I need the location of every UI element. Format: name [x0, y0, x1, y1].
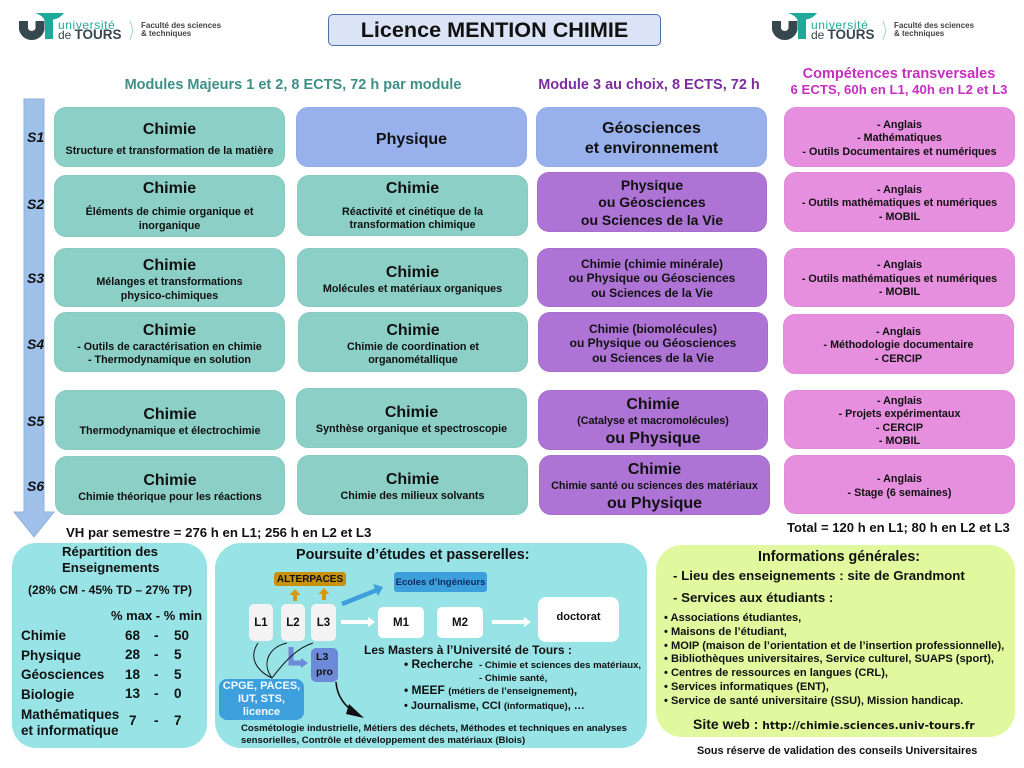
logo right: de	[811, 28, 825, 42]
column 3: S2 options: ou Géosciences	[598, 194, 706, 210]
table rows: 18	[125, 667, 140, 682]
column 1: S1 chimie: Chimie	[143, 121, 196, 138]
column 4: S5 compétences: - Projets expérimentaux	[839, 408, 960, 420]
heading: module 3: Module 3 au choix, 8 ECTS, 72 h	[538, 77, 760, 93]
column 1: S3 chimie	[54, 248, 285, 307]
table rows: -	[154, 667, 158, 682]
column 2: S3 chimie: Chimie	[386, 264, 439, 281]
panel: répartition des enseignements	[12, 543, 207, 748]
heading: compétences transversales: Compétences transversales	[803, 66, 995, 82]
column 4: S5 compétences: - CERCIP	[876, 422, 923, 434]
site web: Site web : http://chimie.sciences.univ-tours.fr	[693, 716, 975, 732]
column 1: S6 chimie: Chimie	[143, 472, 197, 489]
box: CPGE PACES: IUT, STS,	[238, 693, 285, 705]
column 3: S4 options: ou Physique ou Géosciences	[570, 336, 736, 350]
table rows: 5	[174, 667, 182, 682]
total compétences: Total = 120 h en L1; 80 h en L2 et L3	[787, 520, 1010, 535]
logo right	[772, 13, 975, 42]
column 3: S5 options	[538, 390, 768, 450]
column 1: S1 chimie: Structure et transformation de la matière	[66, 145, 273, 157]
services list: • MOIP (maison de l’orientation et de l’insertion professionnelle),	[664, 640, 1004, 652]
box: L3 pro: L3	[316, 651, 328, 663]
column 1: S3 chimie: Chimie	[143, 257, 196, 274]
column 4: S2 compétences	[784, 172, 1015, 232]
column 1: S5 chimie: Thermodynamique et électrochimie	[79, 425, 260, 437]
table rows: -	[154, 647, 158, 662]
column 3: S6 options: Chimie santé ou sciences des matériaux	[551, 480, 758, 492]
table rows: Physique	[21, 648, 81, 663]
column 4: S1 compétences: - Anglais	[877, 119, 922, 131]
table rows: 7	[174, 713, 182, 728]
column 3: S2 options	[537, 172, 767, 232]
column 2: S6 chimie: Chimie	[386, 471, 439, 488]
logo left	[19, 13, 222, 42]
box: ALTERPACES: ALTERPACES	[277, 574, 343, 584]
column 2: S4 chimie: organométallique	[368, 354, 458, 366]
table rows: 13	[125, 686, 140, 701]
table rows	[21, 628, 189, 738]
box: L3 pro	[311, 648, 338, 682]
column 4: S5 compétences: - Anglais	[877, 394, 922, 406]
column 2: S6 chimie: Chimie des milieux solvants	[340, 490, 484, 502]
column 1: S3 chimie: Mélanges et transformations	[96, 276, 243, 288]
table rows: 5	[174, 647, 182, 662]
column 1: S2 chimie: Éléments de chimie organique et	[86, 206, 253, 218]
column 4: S4 compétences	[783, 314, 1014, 374]
masters list: - Chimie santé,	[479, 672, 547, 684]
column 3: S6 options: Chimie	[628, 461, 681, 478]
column 4: S6 compétences: - Anglais	[877, 473, 922, 485]
column 2: S6 chimie	[297, 455, 528, 515]
box: L3: L3	[317, 616, 330, 628]
services list: • Services informatiques (ENT),	[664, 681, 829, 693]
column 1: S2 chimie: inorganique	[139, 220, 200, 232]
column 4: S3 compétences: - Anglais	[877, 259, 922, 271]
masters list: • MEEF (métiers de l’enseignement),	[404, 683, 577, 697]
table header: % max - % min	[111, 608, 202, 623]
column 3: S3 options: ou Physique ou Géosciences	[569, 271, 735, 285]
services list: • Associations étudiantes,	[664, 612, 801, 624]
column 2: S2 chimie: Réactivité et cinétique de la	[342, 206, 483, 218]
column 1: S4 chimie	[54, 312, 285, 372]
box: écoles d'ingénieurs	[394, 572, 487, 592]
services list: • Service de santé universitaire (SSU), Mission handicap.	[664, 695, 963, 707]
box: CPGE PACES: CPGE, PACES,	[223, 680, 300, 692]
column 1: S4 chimie: Chimie	[143, 322, 196, 338]
panel: informations générales	[656, 545, 1015, 737]
column 1: S2 chimie: Chimie	[143, 180, 196, 197]
panel heading: Enseignements	[62, 560, 159, 575]
table rows: -	[154, 713, 158, 728]
column 2: S4 chimie: Chimie de coordination et	[347, 340, 479, 352]
services heading: - Services aux étudiants :	[673, 590, 833, 605]
column 1: S3 chimie: physico-chimiques	[121, 290, 218, 302]
label: S5: S5	[27, 413, 44, 429]
column 1: S5 chimie	[55, 390, 285, 450]
table rows: Géosciences	[21, 667, 104, 682]
title: Licence MENTION CHIMIE	[361, 17, 628, 42]
box: CPGE PACES: licence	[243, 706, 280, 718]
services list: • Centres de ressources en langues (CRL),	[664, 667, 888, 679]
column 4: S2 compétences: - Anglais	[877, 184, 922, 196]
logo right: TOURS	[828, 27, 875, 42]
heading: compétences transversales: 6 ECTS, 60h en L1, 40h en L2 et L3	[791, 82, 1007, 97]
services list	[664, 612, 1004, 707]
panel heading: Répartition des	[62, 544, 158, 559]
column 1: S4 chimie: - Outils de caractérisation en chimie	[77, 340, 262, 352]
column 3: S1 géosciences: Géosciences	[602, 120, 701, 137]
box: L1	[249, 604, 273, 641]
box: M1: M1	[393, 616, 409, 628]
box: écoles d'ingénieurs: Ecoles d’ingénieurs	[396, 576, 485, 588]
column 3: S4 options: ou Sciences de la Vie	[592, 351, 714, 365]
services list: • Bibliothèques universitaires, Service culturel, SUAPS (sport),	[664, 653, 994, 665]
box: L2: L2	[286, 616, 300, 628]
column 2: S1 physique	[296, 107, 527, 167]
column 4: S3 compétences	[784, 248, 1015, 307]
label: S3: S3	[27, 270, 44, 286]
title	[328, 14, 661, 46]
column 2: S3 chimie	[297, 248, 528, 307]
column 3: S4 options: Chimie (biomolécules)	[589, 322, 717, 336]
masters list: • Journalisme, CCI (informatique), …	[404, 700, 585, 712]
column 3: S5 options: Chimie	[626, 396, 680, 413]
column 4: S3 compétences: - MOBIL	[879, 286, 920, 298]
table rows: 28	[125, 647, 140, 662]
heading: modules majeurs: Modules Majeurs 1 et 2, 8 ECTS, 72 h par module	[125, 77, 461, 93]
box: M2: M2	[452, 616, 468, 628]
column 1: S6 chimie: Chimie théorique pour les réactions	[78, 491, 262, 503]
column 4: S1 compétences: - Outils Documentaires et numériques	[802, 146, 997, 158]
column 3: S5 options: ou Physique	[605, 430, 701, 447]
table rows: Mathématiques	[21, 707, 119, 722]
column 1: S1 chimie	[54, 107, 285, 167]
logo right: université	[811, 18, 868, 32]
box: M2	[437, 607, 483, 638]
logo left: & techniques	[141, 29, 192, 38]
panel heading: Informations générales:	[758, 549, 920, 565]
column 4: S6 compétences: - Stage (6 semaines)	[848, 486, 951, 498]
masters list	[404, 657, 641, 712]
table rows: 0	[174, 686, 182, 701]
box: CPGE PACES	[219, 679, 304, 720]
column 3: S3 options: Chimie (chimie minérale)	[581, 257, 723, 271]
box: doctorat: doctorat	[556, 610, 600, 622]
logo left: de	[58, 28, 72, 42]
column 4: S3 compétences: - Outils mathématiques et numériques	[802, 273, 997, 285]
label: S4: S4	[27, 336, 44, 352]
column 2: S2 chimie: transformation chimique	[349, 219, 476, 231]
column 4: S4 compétences: - CERCIP	[875, 353, 922, 365]
column 4: S5 compétences: - MOBIL	[879, 435, 920, 447]
column 1: S4 chimie: - Thermodynamique en solution	[88, 354, 251, 366]
licences pro list: Cosmétologie industrielle, Métiers des déchets, Méthodes et techniques en analyses	[241, 723, 627, 734]
logo right: & techniques	[894, 29, 945, 38]
column 4: S6 compétences	[784, 455, 1015, 514]
table rows: 68	[125, 628, 140, 643]
column 2: S2 chimie: Chimie	[386, 180, 439, 196]
column 3: S3 options: ou Sciences de la Vie	[591, 286, 713, 300]
column 1: S6 chimie	[55, 456, 285, 515]
column 3: S4 options	[538, 312, 768, 372]
logo left: université	[58, 18, 115, 32]
column 1: S5 chimie: Chimie	[143, 406, 197, 423]
box: M1	[378, 607, 424, 638]
table rows: Chimie	[21, 628, 66, 643]
masters heading: Les Masters à l’Université de Tours :	[364, 643, 572, 657]
column 3: S6 options: ou Physique	[607, 495, 702, 512]
label: S1: S1	[27, 129, 44, 145]
box: L2	[281, 604, 305, 641]
lieu des enseignements: - Lieu des enseignements : site de Grandmont	[673, 568, 965, 583]
column 3: S1 géosciences	[536, 107, 767, 167]
table rows: 7	[129, 713, 137, 728]
box: L3	[311, 604, 336, 641]
volume horaire par semestre: VH par semestre = 276 h en L1; 256 h en L2 et L3	[66, 525, 371, 540]
arrow: semesters	[13, 98, 55, 538]
column 4: S2 compétences: - MOBIL	[879, 211, 920, 223]
label: S6: S6	[27, 478, 44, 494]
masters list: - Chimie et sciences des matériaux,	[479, 660, 641, 671]
column 4: S5 compétences	[784, 390, 1015, 449]
heading: compétences transversales	[791, 66, 1007, 97]
panel: poursuite d'études	[215, 543, 647, 748]
column 2: S5 chimie: Chimie	[385, 404, 438, 421]
arrows diagram	[253, 584, 531, 718]
table rows: 50	[174, 628, 189, 643]
column 4: S4 compétences: - Anglais	[876, 326, 921, 338]
table rows: -	[154, 628, 158, 643]
column 3: S2 options: Physique	[621, 177, 683, 193]
column 2: S3 chimie: Molécules et matériaux organiques	[323, 283, 502, 295]
licences pro list	[241, 723, 627, 746]
services list: • Maisons de l’étudiant,	[664, 626, 787, 638]
column 4: S1 compétences: - Mathématiques	[857, 132, 942, 144]
box: L1: L1	[254, 616, 268, 628]
column 3: S5 options: (Catalyse et macromolécules)	[577, 415, 729, 427]
column 4: S1 compétences	[784, 107, 1015, 167]
column 2: S4 chimie: Chimie	[386, 322, 440, 338]
footer note: Sous réserve de validation des conseils Universitaires	[697, 745, 977, 757]
column 2: S2 chimie	[297, 175, 528, 236]
CM TD TP split: (28% CM - 45% TD – 27% TP)	[28, 583, 192, 597]
logo left: TOURS	[74, 27, 122, 42]
column 1: S2 chimie	[54, 175, 285, 237]
box: L3 pro: pro	[316, 666, 333, 678]
masters list: • Recherche	[404, 657, 473, 671]
column 2: S1 physique: Physique	[376, 131, 447, 148]
licences pro list: sensorielles, Contrôle et développement des matériaux (Blois)	[241, 735, 525, 746]
table rows: Biologie	[21, 687, 74, 702]
column 4: S4 compétences: - Méthodologie documentaire	[824, 339, 973, 351]
box: doctorat	[538, 597, 619, 642]
column 3: S3 options	[537, 248, 767, 307]
column 4: S2 compétences: - Outils mathématiques et numériques	[802, 197, 997, 209]
logo right: Faculté des sciences	[894, 21, 975, 30]
column 3: S1 géosciences: et environnement	[585, 140, 718, 157]
column 2: S5 chimie	[296, 388, 527, 448]
column 3: S2 options: ou Sciences de la Vie	[581, 212, 723, 228]
column 2: S5 chimie: Synthèse organique et spectroscopie	[316, 423, 507, 435]
panel heading	[62, 544, 159, 575]
logo left: Faculté des sciences	[141, 21, 222, 30]
table rows: et informatique	[21, 723, 119, 738]
panel heading: Poursuite d’études et passerelles:	[296, 547, 530, 563]
label: S2: S2	[27, 196, 44, 212]
table rows: -	[154, 686, 158, 701]
column 3: S6 options	[539, 455, 770, 515]
column 2: S4 chimie	[298, 312, 528, 372]
